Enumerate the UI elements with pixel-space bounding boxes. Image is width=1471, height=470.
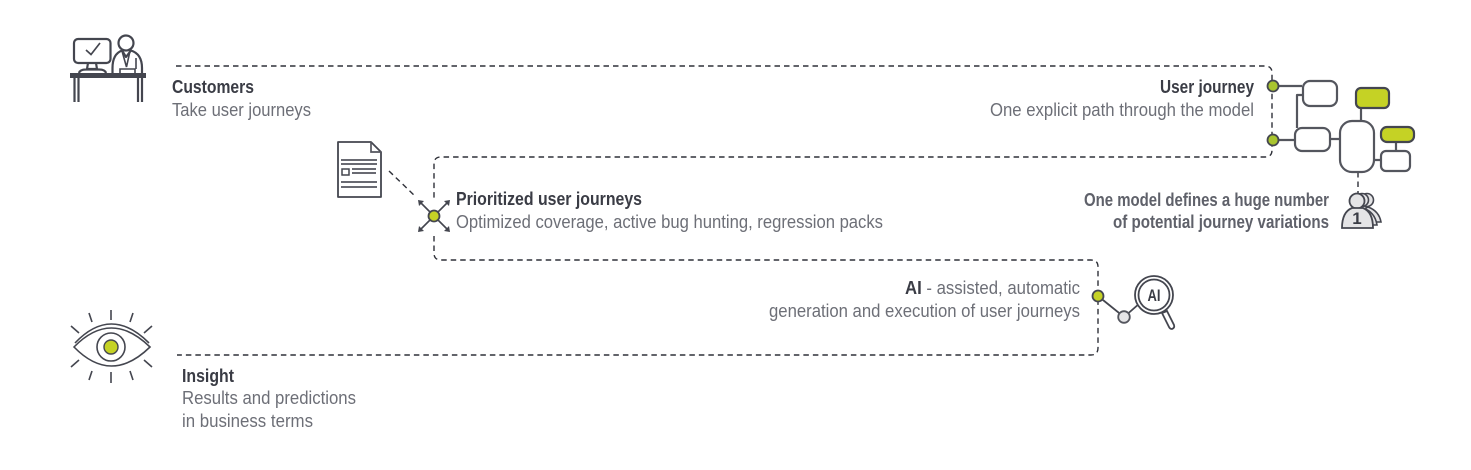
icon: journey model diagram: [1268, 80, 1414, 172]
icon: document: [338, 142, 381, 197]
icon: people with number one: [1342, 194, 1381, 228]
icon: prioritization arrows: [418, 200, 450, 232]
icon: eye: [71, 310, 152, 383]
text: AI assisted generation: generation and execution of user journeys: [769, 300, 1080, 321]
text: one model note: [1084, 189, 1329, 232]
icon: AI magnifier: AI: [1148, 286, 1160, 305]
text: one model note: of potential journey variations: [1113, 211, 1329, 232]
text: user journey: User journey: [1160, 76, 1255, 97]
text: insight: [182, 365, 356, 431]
text: one model note: One model defines a huge number: [1084, 189, 1329, 210]
text: prioritized user journeys: Prioritized user journeys: [456, 188, 642, 209]
text: customers: Customers: [172, 76, 254, 97]
icon: AI magnifier: [1092, 276, 1174, 329]
text: AI assisted generation: [769, 277, 1080, 321]
text: AI assisted generation: AI - assisted, automatic: [905, 277, 1080, 298]
text: insight: in business terms: [182, 410, 313, 431]
text: user journey: One explicit path through the model: [990, 99, 1254, 120]
text: prioritized user journeys: Optimized coverage, active bug hunting, regression packs: [456, 211, 883, 232]
text: customers: Take user journeys: [172, 99, 311, 120]
text: prioritized user journeys: [456, 188, 883, 232]
dashed journey path: [176, 66, 1358, 355]
text: user journey: [990, 76, 1255, 120]
text: customers: [172, 76, 311, 120]
icon: people with number one: 1: [1352, 209, 1362, 228]
icon: customer at desk: [70, 36, 146, 102]
text: insight: Insight: [182, 365, 234, 386]
text: insight: Results and predictions: [182, 387, 356, 408]
